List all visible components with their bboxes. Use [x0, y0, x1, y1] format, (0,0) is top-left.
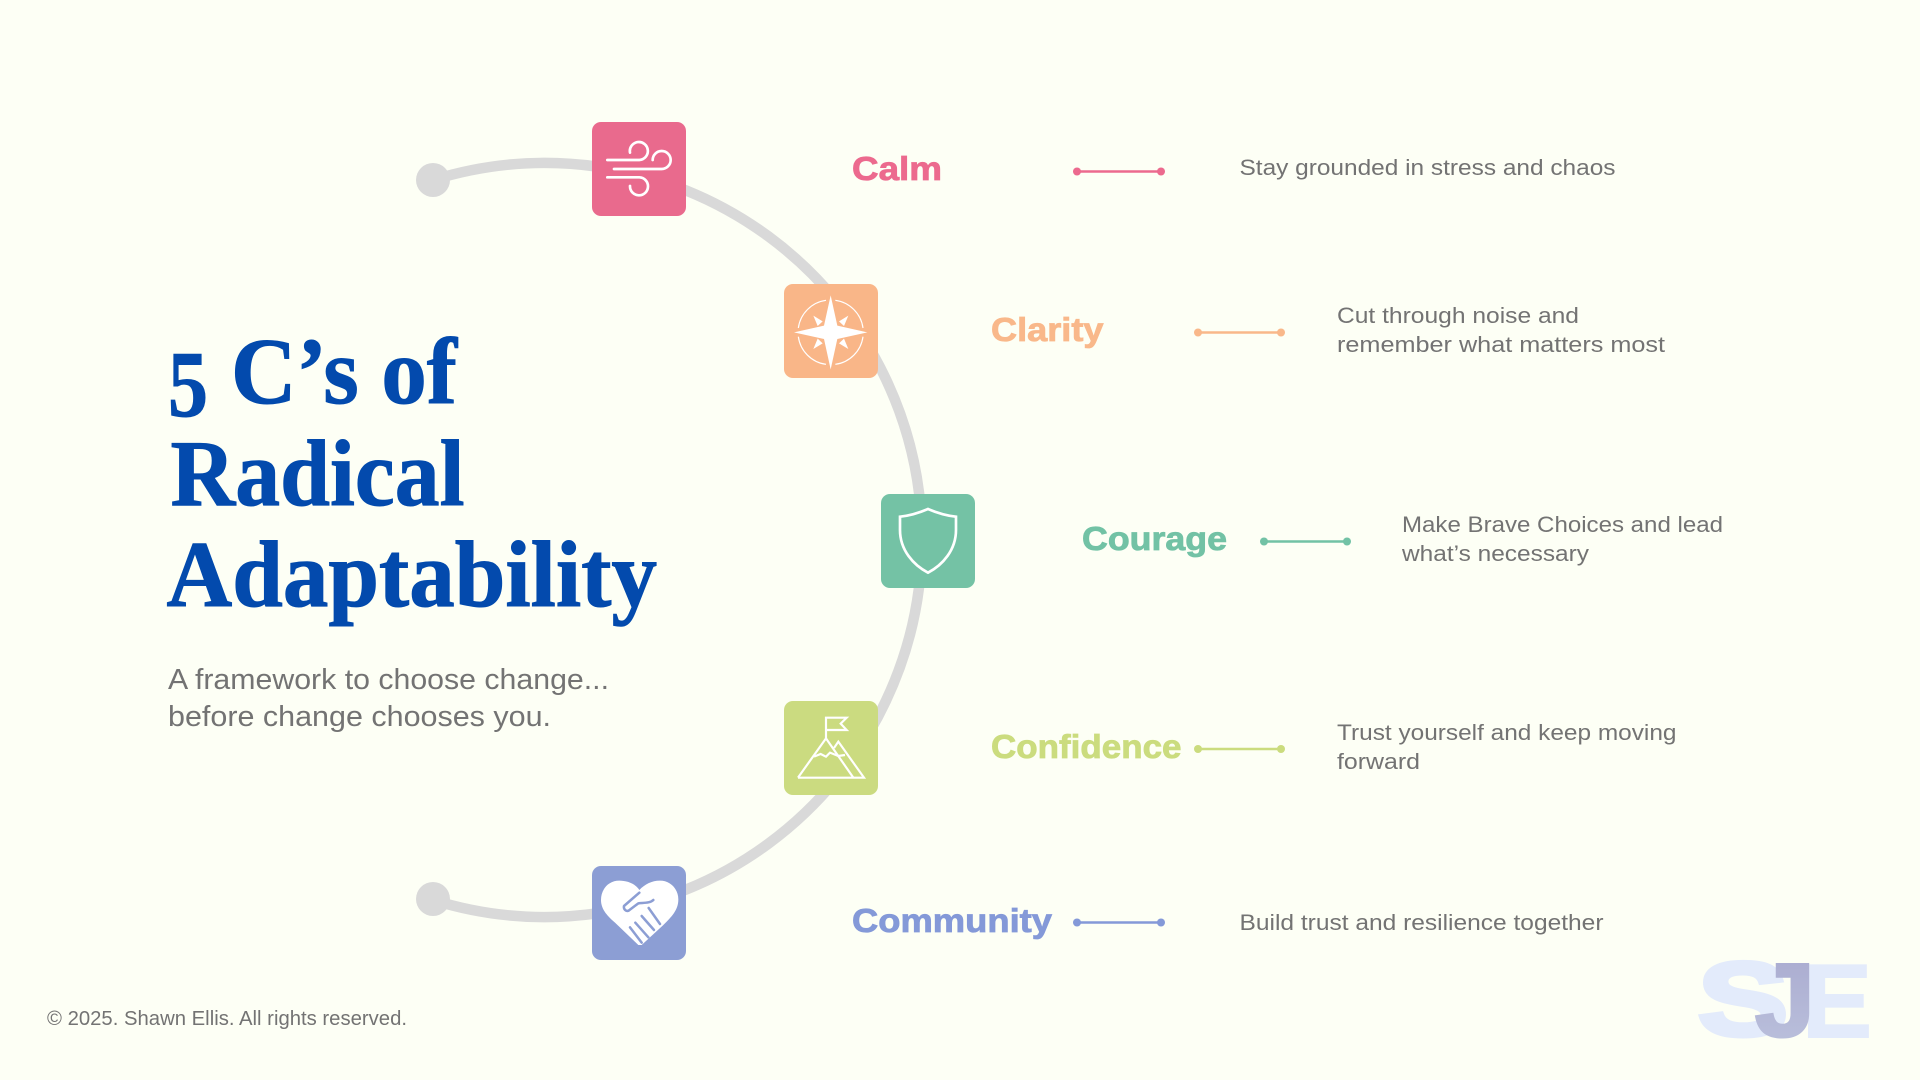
subtitle	[168, 664, 609, 733]
connector: clarity	[1194, 328, 1285, 336]
copyright footer: © 2025. Shawn Ellis. All rights reserved.	[47, 1008, 407, 1030]
title: Adaptability	[166, 523, 657, 627]
description: confidence	[1337, 720, 1676, 774]
panel: community	[592, 866, 1604, 960]
panel: confidence	[784, 701, 1676, 795]
title: C’s of	[231, 320, 459, 424]
label: confidence: Confidence	[991, 728, 1182, 765]
title: Radical	[170, 422, 464, 526]
icon: wind	[592, 122, 686, 216]
arc connector	[416, 163, 922, 917]
connector: community	[1073, 918, 1165, 926]
logo: SJE: S	[1698, 942, 1788, 1058]
label: clarity: Clarity	[991, 311, 1104, 348]
connector: calm	[1073, 168, 1165, 176]
description: confidence: Trust yourself and keep moving	[1337, 720, 1676, 745]
description: community: Build trust and resilience together	[1240, 910, 1604, 935]
description: courage	[1401, 512, 1723, 566]
description: courage: Make Brave Choices and lead	[1402, 512, 1723, 537]
label: community: Community	[852, 902, 1053, 939]
icon: compass	[784, 284, 878, 378]
logo: SJE	[1698, 942, 1872, 1060]
description: calm: Stay grounded in stress and chaos	[1240, 155, 1616, 180]
icon: shield	[881, 494, 975, 588]
description: courage: what’s necessary	[1401, 541, 1590, 566]
icon: heart handshake	[592, 866, 686, 960]
title	[166, 320, 657, 627]
subtitle: before change chooses you.	[168, 701, 551, 733]
description: clarity: remember what matters most	[1337, 332, 1666, 357]
description: confidence: forward	[1337, 749, 1420, 774]
icon: mountain flag	[784, 701, 878, 795]
subtitle: A framework to choose change...	[168, 664, 609, 696]
label: courage: Courage	[1082, 520, 1227, 557]
panel: courage	[881, 494, 1723, 588]
connector: confidence	[1194, 745, 1285, 753]
panel: clarity	[784, 284, 1666, 378]
label: calm: Calm	[852, 150, 942, 187]
title: 5	[168, 333, 208, 437]
connector: courage	[1260, 538, 1351, 546]
description: clarity	[1337, 303, 1666, 357]
logo: SJE: E	[1802, 944, 1872, 1060]
logo: SJE: J	[1755, 943, 1815, 1059]
description: clarity: Cut through noise and	[1337, 303, 1579, 328]
panel: calm	[592, 122, 1616, 216]
